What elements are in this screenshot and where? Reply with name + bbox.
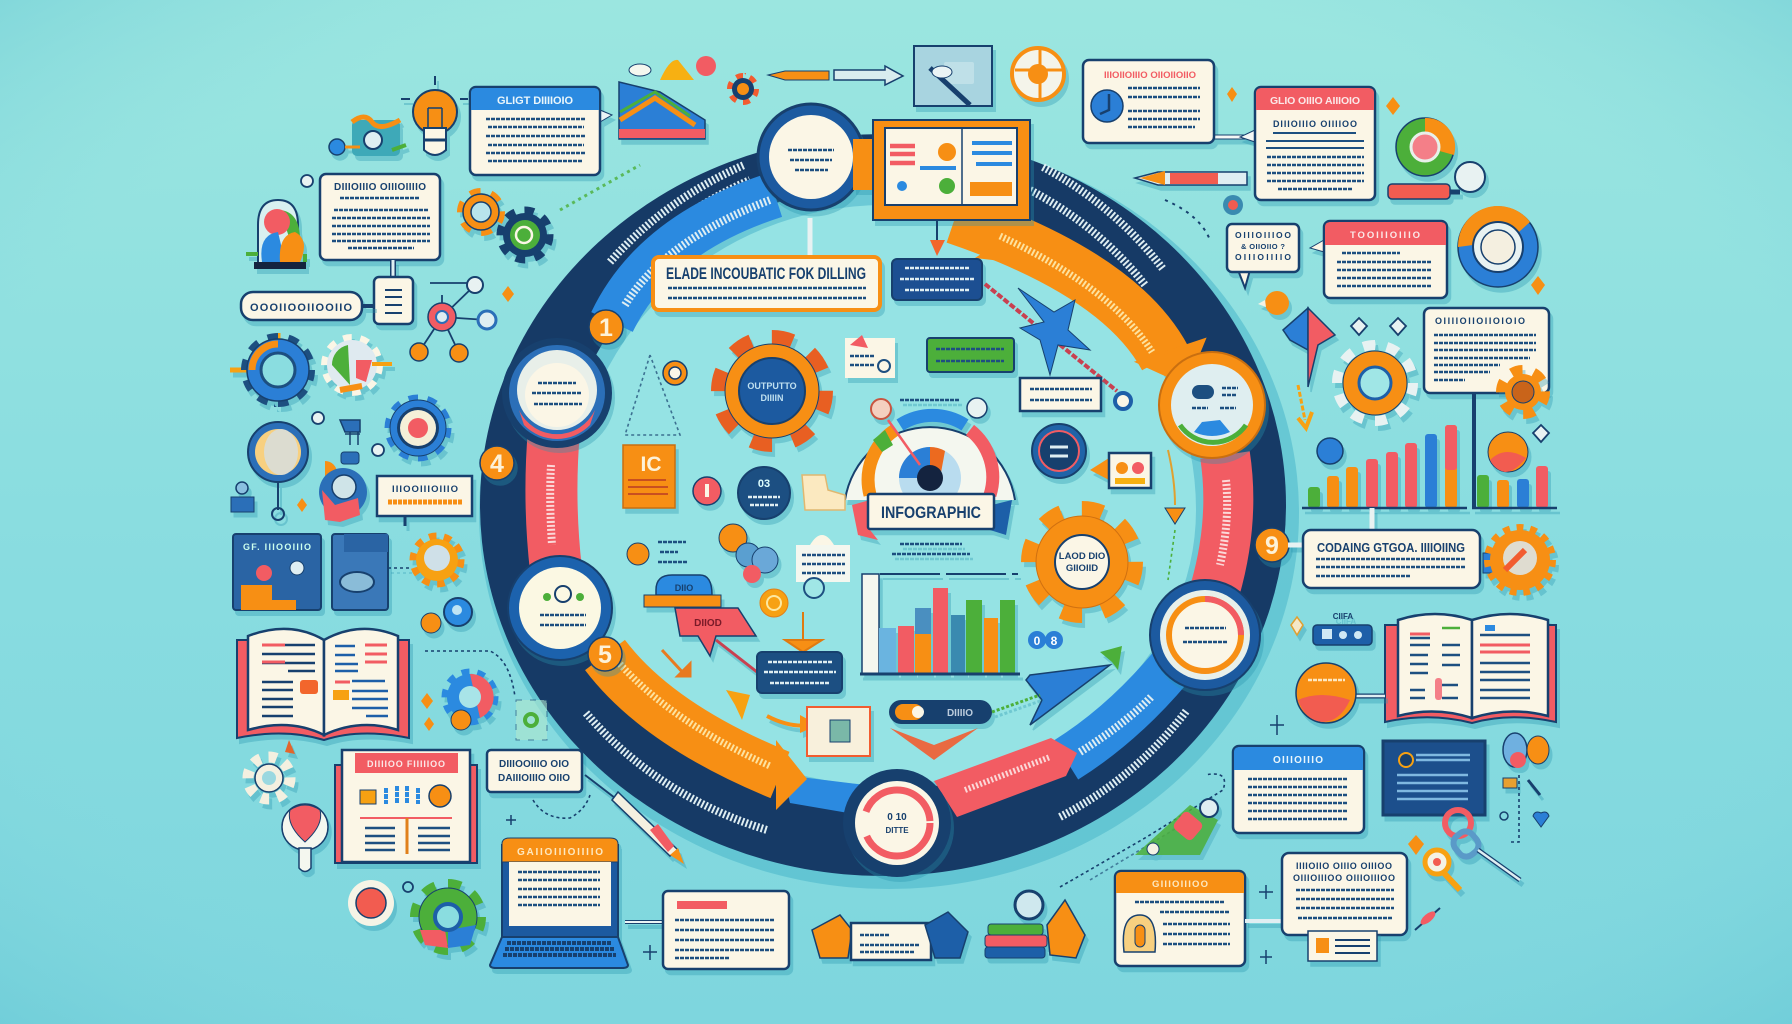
blue cards: GF. IIIOOIIIO [243,542,311,552]
badge 5: 5 [598,641,612,669]
sparkle [1408,835,1424,855]
navy badge: 03 [758,478,770,490]
navy callout [716,640,842,693]
device with pin: CIIFA [1333,612,1353,621]
document panel: DIIIIOO FIIIIIOO [367,759,445,769]
big orange gear: OUTPUTTO [747,381,797,391]
cream panel lower right: OIIIOIIIOO OIIIOIIIOO [1293,873,1395,883]
kite [1283,308,1335,387]
orange sparkle [502,286,514,302]
green gear [416,885,480,949]
orange coin [760,589,788,617]
image card with orange pointer [1090,453,1151,488]
pill [889,695,1040,724]
top right sparkles [1227,87,1545,295]
orange notch [726,690,750,720]
dotted line and heart [1500,775,1549,842]
small orange ring [663,361,687,385]
navy eye circle [1032,424,1086,478]
arrow: blue bottom [784,775,865,815]
person icon [246,200,306,269]
dotted trail right [1165,200,1210,240]
orange and green gears [461,192,549,259]
callout with orange line: IIIOOIIIOIIIO [392,484,458,495]
cream panel lower right: IIIIOIIO OIIIO OIIIOO [1296,861,1392,871]
magnifier key [1425,850,1460,890]
blue panel lower right: OIIIOIIIO [1273,755,1323,766]
callout lower left [487,750,582,792]
balloons [1503,733,1549,795]
eraser tool [1135,799,1218,855]
small card [1308,931,1377,961]
orange framed screen [853,120,1030,220]
arrow: blue lower right [1066,668,1170,760]
navy note panel [892,259,982,300]
laptop [490,838,628,968]
green dashed tag [516,700,547,740]
open book left [237,629,409,740]
central gauge [845,398,1015,554]
ring chart [1458,206,1538,287]
arrow: red bottom [934,738,1077,817]
big orange gear [718,337,826,445]
navy badge [738,467,790,519]
big right gear: LAOD DIO [1059,551,1105,562]
node: bottom circle [843,769,951,877]
pendant dial [248,422,308,520]
blue red gear [445,672,495,730]
clock panel: IIIOIIOIIIO OIIOIIOIIO [1104,70,1196,81]
blue cap [644,575,721,607]
pen [585,775,684,864]
node: right upper circle [1159,352,1265,458]
eye dot [1223,195,1243,215]
orange document: IC [640,453,662,476]
ring text strips [586,165,1187,830]
badge 9 [1255,528,1289,562]
node: top circle [758,104,864,210]
orange panel lower right [1115,871,1245,966]
big right gear [1029,509,1135,615]
node: left upper circle [502,338,612,448]
cream note [796,535,850,582]
orange small dot with label [627,542,688,565]
scroll hand [802,475,845,510]
bubble: OIIIOIIIOO [1235,230,1291,240]
cream panel lower right [1245,853,1407,935]
pill label [241,292,374,320]
node: left lower circle [508,556,612,660]
orange ball [1258,291,1289,315]
callout lower left: DIIIOOIIIO OIO [499,759,569,770]
big orange gear: DIIIIN [760,393,784,403]
central bar chart [860,574,1020,674]
target gear [388,398,448,458]
connector and list card [374,260,413,324]
orange panel lower right: GIIIOIIIOO [1152,879,1208,890]
laptop: GAIIOIIIOIIIIO [517,847,603,858]
callout lower left: DAIIIOIIIO OIIO [498,773,570,784]
red puzzle gear [319,461,367,522]
red speech: DIIOD [694,618,722,629]
node: bottom circle: DITTE [885,826,909,835]
orange sparkle small [297,498,307,512]
text panel left [320,174,440,260]
small orange arrow [662,650,690,676]
stem [1472,393,1476,508]
dotted connector [425,651,515,697]
multicolor small gear [388,536,461,584]
stacked books with magnifier [985,891,1085,958]
orange arrow down [1298,385,1312,428]
plus marks [506,715,1284,964]
badge 4 [480,446,514,480]
orange chevron [890,728,978,760]
tool with ring [1388,162,1485,199]
bubble: OIIIOIIIIO [1235,252,1291,262]
document panel [335,750,477,863]
arrow: orange upper right [955,218,1204,384]
red dot [693,477,721,505]
coding panel [1288,508,1480,588]
arrow: red left [550,430,556,570]
orange document [623,445,675,508]
stem and arrow under screen [810,218,945,256]
hands holding card [812,912,968,960]
blue header panel [470,87,612,175]
arrow: blue upper left [612,195,775,322]
blue dot [1317,438,1343,464]
orange right gear [1337,345,1413,421]
numerals 08 [1028,631,1063,649]
bubble: & OIIOIIO ? [1241,242,1285,251]
small orange gear [1501,370,1545,414]
clock panel [1083,60,1255,143]
badge 1: 1 [599,314,613,342]
orange diamonds [421,693,434,731]
numerals 08: 0 [1034,634,1041,648]
red header panel large: GLIO OIIIO AIIIOIO [1270,95,1360,107]
title panel [653,257,880,310]
red plate [348,880,394,926]
network diagram [410,277,496,362]
green card [927,338,1014,372]
top-centre icons [619,82,705,139]
arrow: orange lower left [605,655,807,810]
device with pin [1291,612,1372,645]
red speech [675,608,756,656]
blue arrow rising [1026,646,1122,725]
pill: DIIIIO [947,708,973,719]
top pie ring [1012,48,1064,100]
top left: bulb [401,76,468,155]
star arrow [985,284,1131,409]
chain key [1445,810,1520,880]
top pencil and arrow [768,66,903,85]
gold down arrow [1165,450,1185,580]
top small gear [730,76,756,102]
blue cards [233,534,388,610]
bubble [1227,224,1299,288]
small note card [845,335,895,378]
small red pencil [1415,908,1440,930]
blue stand icon [340,420,360,464]
blue header panel: GLIGT DIIIIOIO [497,95,573,107]
blue orange gear [230,333,311,403]
cloud triangle blob [629,56,716,80]
navy card [1383,741,1485,815]
orange crossing arrow [785,612,822,652]
small balls [421,598,472,633]
image card with arrow [767,707,870,756]
donut [1396,118,1455,176]
picture card with tool [914,46,992,106]
blue cap: DIIO [675,583,693,593]
red header panel large: DIIIOIIIO OIIIIOO [1273,119,1357,129]
arrow: red right [1215,455,1228,590]
gear right with connector [1483,528,1552,592]
badge 9: 9 [1265,532,1279,560]
text panel right: OIIIIOIIOIIOIOIO [1435,316,1525,326]
node: bottom circle: 0 10 [887,812,907,823]
red header panel large [1240,87,1375,200]
coding panel: CODAING GTGOA. IIIIOIING [1317,540,1465,555]
node: right lower circle [1150,580,1260,690]
pill label: OOOIIOOIIOOIIO [250,302,352,314]
orange ball with link [1296,663,1385,723]
circular process ring [479,134,1299,889]
central gauge: INFOGRAPHIC [881,503,981,522]
right pen [1135,171,1247,185]
multicolor gear [325,338,392,392]
outlined diamonds [1351,318,1549,442]
small bar chart [1472,466,1557,508]
dotted rope [1060,774,1225,887]
title panel: ELADE INCOUBATIC FOK DILLING [666,264,866,283]
big right gear: GIIOIID [1066,563,1098,574]
bar chart right [1302,425,1467,508]
knot icon [719,524,778,583]
map pin bulb [282,804,328,872]
badge 4: 4 [490,450,504,478]
O ring [804,578,824,598]
panel bottom with arrow [625,891,789,969]
cream card [1020,378,1101,411]
open book right [1385,614,1556,723]
text panel left: DIIIOIIIO OIIIOIIIIO [334,182,426,193]
orange dot large [1488,432,1528,472]
badge 1 [589,310,623,344]
dashed dot trail [560,165,640,210]
white gear [248,740,295,799]
dashed triangle sketch [625,355,680,435]
red header panel small [1310,221,1447,298]
blue panel lower right [1233,746,1364,833]
small person [231,482,254,512]
numerals 08: 8 [1051,634,1058,648]
badge 5 [588,637,622,671]
callout with orange line [377,476,472,526]
teal machine icon [329,117,406,156]
text panel right [1424,308,1549,393]
small ring icons [301,175,384,456]
red header panel small: TOOIIIOIIIO [1350,230,1420,241]
